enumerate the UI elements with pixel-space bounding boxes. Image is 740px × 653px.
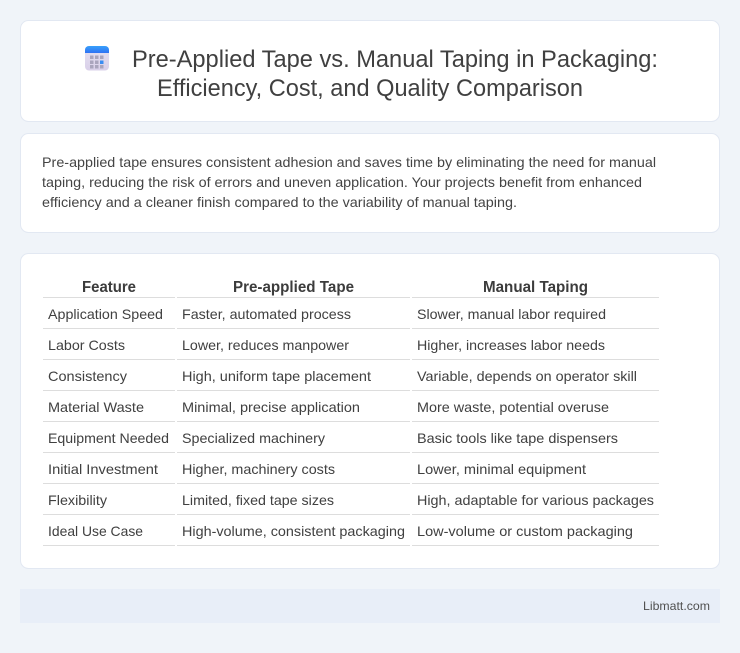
row: application speed: Slower, manual labor required (417, 306, 606, 322)
row: initial investment: Higher, machinery costs (182, 461, 335, 477)
row: consistency: Consistency (48, 368, 127, 384)
panel: intro text: taping, reducing the risk of errors and uneven application. Your projects benefit from enhanced (42, 174, 642, 190)
row: material waste: Minimal, precise application (182, 399, 360, 415)
table header: Feature (82, 279, 136, 296)
panel: intro text (20, 134, 720, 232)
footer (20, 589, 720, 623)
row: initial investment: Lower, minimal equipment (417, 461, 586, 477)
title (132, 46, 658, 102)
panel: intro text: efficiency and a cleaner finish compared to the variability of manual taping. (42, 194, 517, 210)
row: ideal use case: Low-volume or custom packaging (417, 523, 633, 539)
row: labor costs: Higher, increases labor needs (417, 337, 605, 353)
panel: intro text: Pre-applied tape ensures consistent adhesion and saves time by eliminating the need for manual (42, 154, 656, 170)
row: ideal use case: Ideal Use Case (48, 523, 143, 539)
panel: comparison table (20, 254, 720, 568)
row: material waste (48, 399, 609, 415)
icon: calendar (85, 46, 109, 70)
row: flexibility: High, adaptable for various packages (417, 492, 654, 508)
row: consistency (48, 368, 637, 384)
row: equipment needed: Equipment Needed (48, 430, 169, 446)
row: consistency: High, uniform tape placement (182, 368, 371, 384)
row: initial investment (48, 461, 586, 477)
row: flexibility (48, 492, 654, 508)
row: material waste: Material Waste (48, 399, 144, 415)
title: Pre-Applied Tape vs. Manual Taping in Packaging: (132, 46, 658, 73)
row: application speed: Faster, automated process (182, 306, 351, 322)
row: labor costs: Lower, reduces manpower (182, 337, 349, 353)
row: ideal use case: High-volume, consistent packaging (182, 523, 405, 539)
row: flexibility: Limited, fixed tape sizes (182, 492, 334, 508)
table header (82, 279, 588, 296)
row: equipment needed: Specialized machinery (182, 430, 325, 446)
row: equipment needed: Basic tools like tape dispensers (417, 430, 618, 446)
row: material waste: More waste, potential overuse (417, 399, 609, 415)
row: equipment needed (48, 430, 618, 446)
title: Efficiency, Cost, and Quality Comparison (157, 75, 583, 102)
row: application speed (48, 306, 606, 322)
row: labor costs (48, 337, 605, 353)
table header: Manual Taping (483, 279, 588, 296)
row: initial investment: Initial Investment (48, 461, 158, 477)
row: consistency: Variable, depends on operator skill (417, 368, 637, 384)
table header: Pre-applied Tape (233, 279, 354, 296)
row: application speed: Application Speed (48, 306, 163, 322)
row: ideal use case (48, 523, 633, 539)
row: labor costs: Labor Costs (48, 337, 125, 353)
footer: Libmatt.com (643, 599, 710, 613)
row: flexibility: Flexibility (48, 492, 107, 508)
panel: title card (20, 20, 720, 122)
